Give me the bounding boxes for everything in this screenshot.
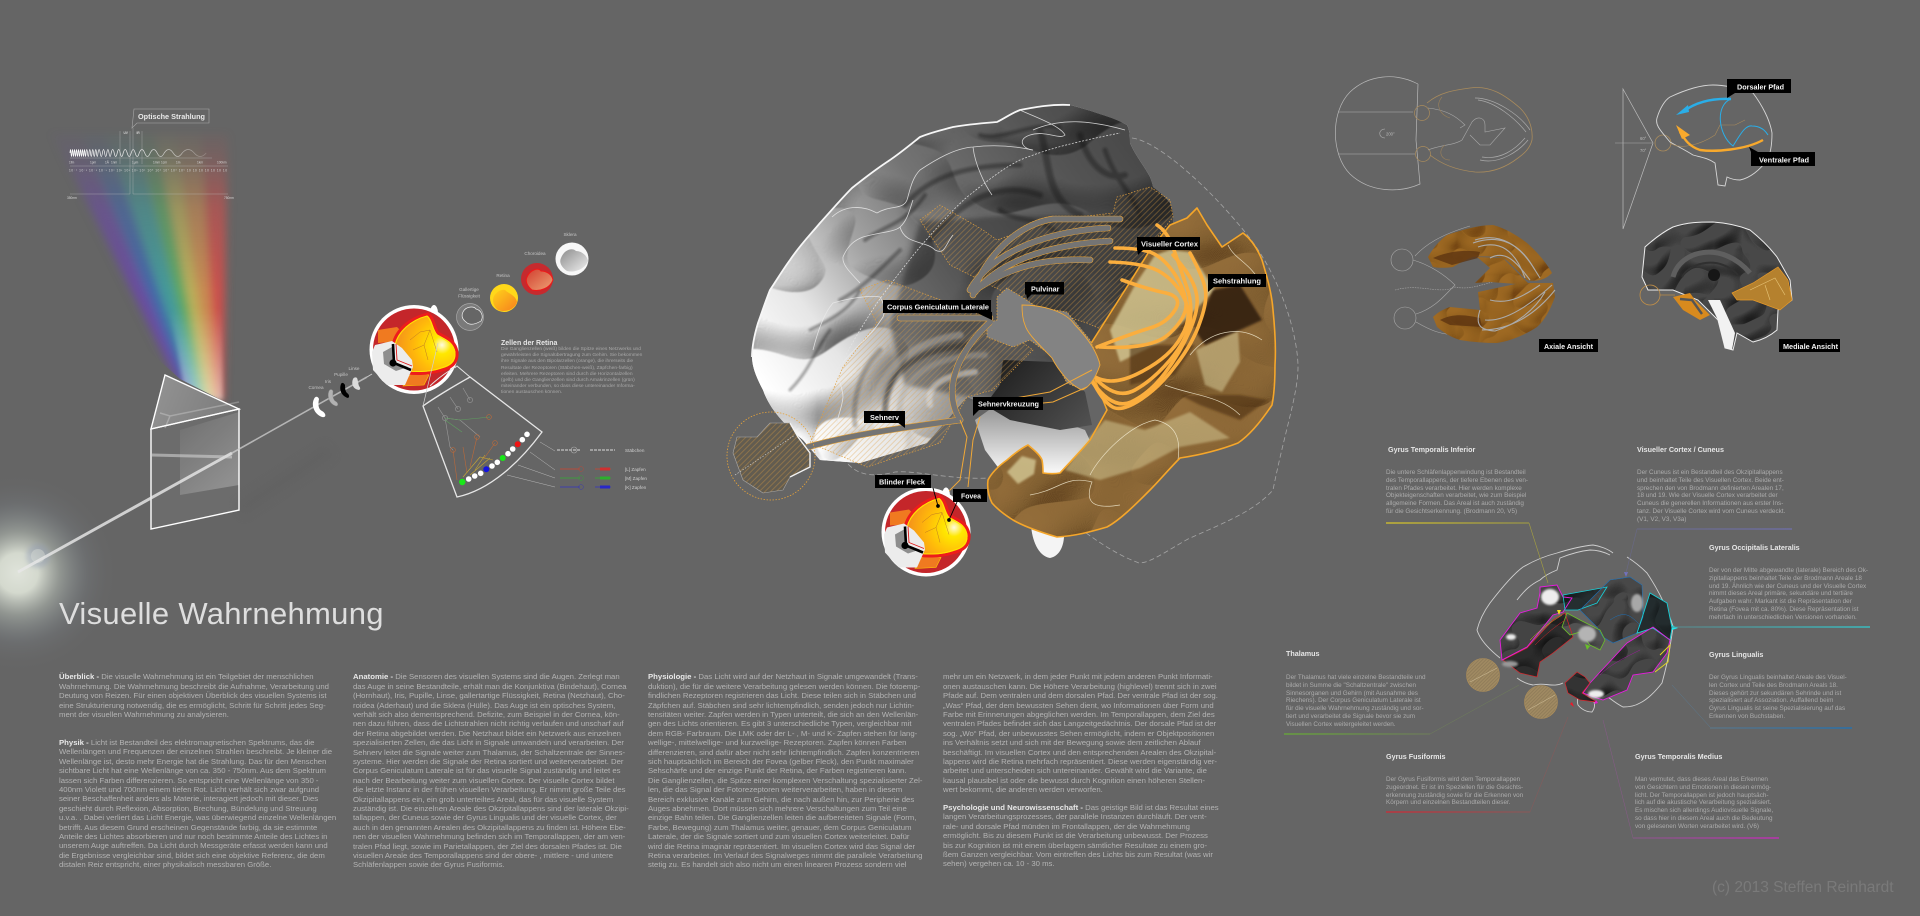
callout text: Thalamus: bildet in Summe die "Schaltzentrale" zwischen (1286, 682, 1416, 689)
text: Physiologie: len, die das Signal der Fotorezeptoren weiterverarbeiten, haben in diesem (648, 785, 902, 794)
callout text: Visueller Cortex / Cuneus: und beinhaltet Teile des Visuellen Cortex. Beide ent- (1637, 477, 1784, 484)
text: Zellen der Retina: miteinander verbunden, so dass diese untereinander Informa- (501, 384, 635, 389)
iris (328, 390, 338, 406)
text: Physiologie: Physiologie - Das Licht wird auf der Netzhaut in Signale umgewandelt (Trans- (648, 672, 918, 681)
text: Physiologie continued: ins Verhältnis setzt und sich mit der Bewegung sowie dem zeitlichen Ablauf (943, 738, 1201, 747)
part labels: Retina (496, 273, 510, 278)
rainbow spectrum (69, 140, 232, 402)
text: Überblick: Wahrnehmung. Die Wahrnehmung beschreibt die Aufnahme, Verarbeitung und (59, 682, 329, 691)
callout text: Visueller Cortex / Cuneus: Visueller Cortex / Cuneus (1637, 445, 1724, 454)
callout leader: fusiform (1386, 717, 1568, 812)
sulci shading (790, 126, 1140, 390)
electromagnetic spectrum scale: UV (124, 131, 129, 135)
text: Anatomie: (Hornhaut), Iris, Pupille, Linse, gallertartige Flüssigkeit, Retina (Netzhaut), Cho- (353, 691, 625, 700)
callout text: Visueller Cortex / Cuneus: (V1, V2, V3, V3a) (1637, 516, 1686, 522)
text: Physiologie: Retina verarbeitet. Im Verlauf des Signalweges nimmt die parallele Verarbeitung (648, 851, 922, 860)
white brainstem and nub (975, 400, 1092, 558)
small eye (882, 488, 970, 576)
text: Zellen der Retina: Resultate der Rezeptoren (Stäbchen-weiß), Zäpfchen-farbig) (501, 366, 633, 371)
receptor labels: Stäbchen (625, 448, 645, 453)
callout text: Gyrus Fusiformis: erkennung zuständig sowie für die Erkennen von (1386, 792, 1523, 798)
callout text: Gyrus Fusiformis: Gyrus Fusiformis (1386, 752, 1446, 761)
text: Anatomie: zuständig ist. Die einzelnen Areale des Okzipitallappens sind der laterale Okzipi- (353, 804, 629, 813)
text: Physiologie: Zäpfchen auf. Stäbchen sind sehr lichtempfindlich, senden jedoch nur Lichtin- (648, 701, 914, 710)
label: Mediale Ansicht (1779, 339, 1840, 352)
visual field top view outline (1335, 77, 1532, 190)
callout text: Thalamus (1286, 649, 1426, 728)
electromagnetic spectrum scale: 1cm (161, 160, 167, 164)
callout text: Gyrus Lingualis: len Cortex und Teile des Brodmann Areals 18. (1709, 682, 1838, 689)
label pointers (897, 249, 1215, 521)
callout text: Visueller Cortex / Cuneus (1637, 445, 1785, 522)
receptor leader lines (507, 442, 555, 487)
text: Anatomie: auch in den genannten Arealen des Okzipitallappens zu finden ist. Höhere Ebe- (353, 823, 626, 832)
text: Anatomie: Corpus Geniculatum Laterale ist für das visuelle Signal zuständig und leitet es (353, 766, 621, 775)
text: Psychologie und Neurowissenschaft: ßem Ganzen vergleichbar. Vom eintreffen des Lichts bis zum Resultat (was wir (943, 850, 1213, 859)
electromagnetic spectrum scale (67, 109, 234, 200)
text: Anatomie: Schläfenlappen sowie der Gyrus Fusiformis. (353, 860, 505, 869)
callout text: Gyrus Occipitalis Lateralis: Der von der Mitte abgewandte (laterale) Bereich des Ok- (1709, 567, 1868, 574)
callout text: Gyrus Temporalis Inferior: des Temporallappens, der tiefere Ebenen des ven- (1386, 477, 1528, 484)
callout leader: temporal medius (1603, 720, 1779, 838)
callout text: Gyrus Temporalis Medius: von gelesenen Worten verarbeitet wird. (V6) (1635, 822, 1759, 830)
text: Anatomie: die letzte Instanz in der frühen visuellen Verarbeitung. Er nimmt große Teile des (353, 785, 626, 794)
white highlights (1502, 589, 1643, 698)
label: Fovea: Fovea (961, 492, 982, 500)
pointer markers (1557, 572, 1678, 707)
electromagnetic spectrum scale: 100km (217, 160, 227, 164)
chiasm gold lines (947, 370, 1092, 493)
receptor labels: [K] Zapfen (625, 485, 647, 490)
text: Physik: 400nm Violett und 700nm einem tiefen Rot. Licht verhält sich zwar aufgrund (59, 785, 319, 794)
label: Ventraler Pfad: Ventraler Pfad (1759, 156, 1809, 164)
part labels: Choroidea (524, 251, 546, 256)
text: Physik: lassen sich Farben differenzieren. So entspricht eine Wellenlänge von 350 - (59, 776, 318, 785)
electromagnetic spectrum scale: 1mm (153, 160, 160, 164)
left eyeball section (727, 412, 815, 500)
text: Physiologie: einzige Bahn teilen. Die Ganglienzellen leiten die aufbereiteten Signale (Form, (648, 813, 916, 822)
callout leader: occipital lateral (1672, 626, 1870, 628)
callout text: Gyrus Temporalis Medius (1635, 752, 1773, 830)
electromagnetic spectrum scale: 1km (197, 160, 203, 164)
sphere: sklera (556, 242, 588, 276)
inner coloured lines (1530, 615, 1670, 675)
callout text: Gyrus Fusiformis: zugeordnet. Er ist im Speziellen für die Gesichts- (1386, 784, 1523, 791)
callout text: Gyrus Fusiformis (1386, 752, 1523, 806)
callout leader: temporal inferior (1386, 523, 1548, 583)
callout leader: lingual (1672, 685, 1852, 728)
electromagnetic spectrum scale: 1Å (105, 160, 110, 164)
label: Sehstrahlung: Sehstrahlung (1213, 276, 1261, 286)
text: Zellen der Retina: tionen austauschen können. (501, 390, 562, 395)
text: Physiologie continued: lappens wird die Retina mehrfach repräsentiert. Diese werden eigenständig ver- (943, 757, 1217, 766)
text: Physiologie continued: Farbe mit Erinnerungen abgeglichen werden. Im Temporallappen, dem Ziel des (943, 710, 1215, 719)
dorsal and ventral pathways (1615, 79, 1815, 229)
text: Anatomie: systeme. Hier werden die Signale der Retina sortiert und weiterverarbeitet. Der (353, 757, 624, 766)
text: Anatomie: Okzipitallappens ein, ein grob unterteiltes Areal, das für das visuelle System (353, 795, 613, 804)
callout text: Thalamus: Sinnesorganen und Gehirn (mit Ausnahme des (1286, 690, 1418, 696)
pupille (340, 383, 349, 398)
text: Physiologie: Farbe, Bewegung) zum Thalamus weiter, genauer, dem Corpus Geniculatum (648, 823, 912, 832)
callout text: Gyrus Occipitalis Lateralis: zipitallappens beinhaltet Teile der Brodmann Areale 18 (1709, 575, 1862, 582)
text: Physiologie: Die Ganglienzellen, die Spitze einer komplexen Verschaltung spezialisierter Zel- (648, 776, 922, 785)
callout text: Gyrus Temporalis Inferior: für die Gesichtserkennung. (Brodmann 20, V5) (1386, 508, 1517, 515)
text: Physiologie: Sehschärfe und der einzige Punkt der Retina, der Farben registrieren kann. (648, 766, 906, 775)
callout text: Gyrus Temporalis Medius: Gyrus Temporalis Medius (1635, 752, 1722, 761)
text: Physiologie: wellige-, mittelwellige- und kurzwellige- Rezeptoren. Zapfen können Farben (648, 738, 906, 747)
text: Physiologie: stetig zu. Es handelt sich also nicht um einen linearen Prozess sondern viel (648, 860, 906, 869)
callout text: Gyrus Lingualis: Gyrus Lingualis (1709, 650, 1763, 659)
electromagnetic spectrum scale: 10⁻⁴ 10⁻³ 10⁻² 10⁻¹ 10⁰ 10¹ 10² 10³ 10⁴ 10⁵ 10⁶ 10⁷ 10⁸ 10⁹ 10 10 10 10 10 10 10 (69, 168, 227, 172)
light source glow (0, 473, 118, 673)
brown temporal/occipital lobe (988, 208, 1275, 537)
callout text: Gyrus Temporalis Inferior (1386, 445, 1528, 515)
part labels: Sklera (563, 232, 577, 237)
colour-coded gyri brain (1466, 545, 1678, 718)
receptor labels: [L] Zapfen (625, 467, 646, 472)
text: Physik: Anteile des Lichtes absorbieren und nur noch bestimmte Anteile des Lichtes in (59, 832, 327, 841)
medial view brain (1640, 222, 1840, 352)
coloured segment outlines (1500, 577, 1672, 702)
callout text: Thalamus: tiert und verarbeitet die Signale bevor sie zum (1286, 713, 1415, 720)
hatched regions (810, 187, 1173, 467)
label: Pulvinar: Pulvinar (1031, 284, 1060, 294)
optic radiation (1092, 225, 1206, 408)
lobe highlights (1007, 250, 1240, 484)
text: Psychologie und Neurowissenschaft (943, 803, 1219, 868)
label: Sehnerv (864, 411, 905, 423)
dashed far-hemisphere outline (843, 138, 1298, 563)
text: Physiologie: differenzieren, sind dafür aber nicht sehr lichtempfindlich. Zapfen konzentrieren (648, 748, 919, 757)
text: Psychologie und Neurowissenschaft: bis zur Kognition ist mit einem überlagern sämtlicher Resultate zu einem gro- (943, 841, 1207, 850)
prism (151, 375, 330, 529)
text: Anatomie: spezialisierten Zellen, die das Licht in Signale umwandeln und verarbeiten. Der (353, 738, 624, 747)
text: Physiologie: tensitäten weiter. Zapfen werden in Typen unterteilt, die sich an den Wellenlän- (648, 710, 918, 719)
dorsal and ventral pathways: 60° (1640, 136, 1647, 141)
text: Physiologie: wird die Retina imaginär repräsentiert. Im visuellen Cortex wird das Signal der (648, 842, 915, 851)
text: Physiologie: dem RGB- Farbraum. Die LMK oder der L- , M- und K- Zapfen stehen für lang- (648, 729, 917, 738)
text: Physiologie continued: sog. „Wo“ Pfad, der unbewusstes Sehen ermöglicht, indem er Objektpositionen (943, 729, 1214, 738)
text: Anatomie: nen dazu führen, dass die Lichtstrahlen nicht richtig verlaufen und unscharf auf (353, 719, 624, 728)
electromagnetic spectrum scale: 1pm (90, 160, 97, 164)
callout text: Thalamus: für die visuelle Wahrnehmung zuständig und sor- (1286, 705, 1424, 712)
electromagnetic spectrum scale: 350nm (67, 196, 77, 200)
main brain illustration (727, 105, 1298, 577)
text: Psychologie und Neurowissenschaft: rale- und dorsale Pfad münden im Frontallappen, der die Wahrnehmung (943, 822, 1190, 831)
text: Zellen der Retina: erleiten. Mehrere Rezeptoren sind durch die Horizontalzellen (501, 372, 633, 377)
callout text: Gyrus Temporalis Medius: licht. Der Temporallappen ist jedoch hauptsäch- (1635, 792, 1769, 798)
label: Sehnerv: Sehnerv (870, 413, 899, 422)
text: Zellen der Retina (501, 340, 642, 395)
callout text: Gyrus Lingualis (1709, 650, 1847, 720)
text: Zellen der Retina: (gelb) und die Ganglienzellen sind durch Amakrinzellen (grün) (501, 378, 635, 383)
callout text: Gyrus Occipitalis Lateralis: Aufgaben wahr. Markant ist die Repräsentation der (1709, 598, 1852, 605)
text: Anatomie: verhält sich also dementsprechend. Defizite, zum Beispiel in der Cornea, kön- (353, 710, 620, 719)
text: Psychologie und Neurowissenschaft: Psychologie und Neurowissenschaft - Das geistige Bild ist das Resultat eines (943, 803, 1219, 812)
text: Psychologie und Neurowissenschaft: sehen) vergehen ca. 10 - 30 ms. (943, 859, 1055, 868)
blue dorsal arrow (1684, 99, 1731, 111)
part labels: Cornea (308, 385, 324, 390)
callout text: Gyrus Temporalis Inferior: tralen Pfades verarbeitet. Hier werden komplexe (1386, 484, 1522, 492)
text: Physiologie continued: Pfade auf. Dem ventralen und dem dorsalen Pfad. Der ventrale Pfad ist der sog. (943, 691, 1218, 700)
part labels: Linse (349, 366, 360, 371)
wave (70, 150, 206, 156)
text: Physiologie continued: ventralen Pfades befindet sich das Langzeitgedächtnis. Der dorsale Pfad ist der (943, 719, 1216, 728)
receptor labels: [M] Zapfen (625, 476, 647, 481)
text: Anatomie: tralen Pfad liegt, sowie im Parietallappen, der Ziel des dorsalen Pfades ist. Die (353, 842, 622, 851)
callout leader: visual cortex (1626, 529, 1792, 573)
label: Blinder Fleck (875, 475, 931, 488)
label: Corpus Geniculatum Laterale (883, 300, 991, 313)
part labels: Flüssigkeit (458, 294, 481, 298)
label: Dorsaler Pfad (1727, 79, 1791, 98)
text: Zellen der Retina: Zellen der Retina (501, 340, 557, 347)
callout text: Visueller Cortex / Cuneus: sprechen den von Brodmann definierten Arealen 17, (1637, 484, 1784, 492)
callout text: Gyrus Temporalis Inferior: Gyrus Temporalis Inferior (1388, 445, 1475, 454)
text: Anatomie: der Retina abgebildet werden. Die Netzhaut bildet ein Netzwerk aus einzelnen (353, 729, 621, 738)
callout text: Gyrus Lingualis: Erkennen von Buchstaben. (1709, 713, 1785, 720)
text: Physiologie: gen des Lichts orientieren. Es gibt 3 unterschiedliche Typen, vergleichbar mit (648, 719, 912, 728)
text: Psychologie und Neurowissenschaft: ermöglicht. Bis zu diesem Punkt ist die Verarbeitung unbewusst. Der Prozess (943, 831, 1208, 840)
white outline (1477, 545, 1673, 712)
eye cross-section (370, 305, 458, 394)
label: Ventraler Pfad (1749, 147, 1815, 166)
text: Physiologie continued: onen austauschen kann. Die Höhere Verarbeitung (highlevel) trennt sich in zwei (943, 682, 1217, 691)
text: Zellen der Retina: gewährleisten die Signalübertragung zum Gehirn. Sie bekommen (501, 353, 642, 358)
text: Anatomie: Anatomie - Die Sensoren des visuellen Systems sind die Augen. Zerlegt man (353, 672, 620, 681)
callout text: Gyrus Lingualis: Dieses gehört zur sekundären Sehrinde und ist (1709, 690, 1841, 696)
deep dark interior (890, 204, 1172, 400)
visual field top view outline: 200° (1386, 132, 1395, 136)
thalamus: pulvinar and nuclei (987, 288, 1100, 390)
sphere: choroidea (521, 263, 553, 295)
label: Sehstrahlung (1208, 274, 1266, 287)
brain segments (1500, 577, 1672, 702)
callout text: Gyrus Temporalis Medius: Es mischen sich allerdings Audiovisuelle Signale, (1635, 807, 1773, 814)
callout text: Thalamus: Thalamus (1286, 649, 1320, 658)
callout leader: thalamus (1284, 685, 1519, 734)
text: Physik: sichtbare Licht hat eine Wellenlänge von ca. 350 - 750nm. Aus dem Spektrum (59, 766, 326, 775)
callout text: Gyrus Fusiformis: Körpern und einzelnen Bestandteilen dieser. (1386, 799, 1510, 806)
text: Physiologie continued (943, 672, 1218, 794)
label: Axiale Ansicht: Axiale Ansicht (1544, 342, 1594, 351)
text: Physik: seiner Beschaffenheit anders als Materie, interagiert jedoch mit dieser. Dies (59, 794, 318, 803)
text: Zellen der Retina: ihre Signale aus den Bipolarzellen (orange), die ihrerseits die (501, 359, 633, 364)
electromagnetic spectrum scale: IR (136, 131, 140, 135)
lobe dark folds (1130, 285, 1268, 420)
text: Überblick: Überblick - Die visuelle Wahrnehmung ist ein Teilgebiet der menschlichen (59, 672, 314, 681)
axial view brain (1391, 225, 1598, 352)
part labels: Gallertige (459, 287, 479, 292)
text: Physiologie (648, 672, 922, 869)
callout text: Thalamus: Der Thalamus hat viele einzelne Bestandteile und (1286, 674, 1426, 681)
white top edge (752, 105, 1070, 357)
hatched eye circles (1466, 658, 1500, 692)
text: Überblick: eine Strukturierung notwendig, die es ermöglicht, Schritt für Schritt jedes Seg- (59, 701, 326, 710)
electromagnetic spectrum scale: 1µm (132, 160, 139, 164)
label: Sehnervkreuzung: Sehnervkreuzung (978, 400, 1039, 408)
callout text: Visueller Cortex / Cuneus: 18 und 19. Wie der Visuelle Cortex verarbeitet der (1637, 492, 1778, 499)
label: Dorsaler Pfad: Dorsaler Pfad (1737, 82, 1784, 92)
text: Physiologie: Laterale, der die Signale sortiert und zum visuellen Cortex weiterleitet. Dafür (648, 832, 909, 841)
receptor labels (625, 448, 647, 490)
text: Physik: u.v.a. . Dabei verliert das Licht Energie, was überwiegend einzelne Wellenlängen (59, 813, 336, 822)
label: Visueller Cortex (1137, 237, 1200, 250)
callout text: Visueller Cortex / Cuneus: Cuneus die generellen Informationen aus erster Ins- (1637, 500, 1783, 507)
callout: Optische Strahlung: Optische Strahlung (138, 112, 205, 121)
electromagnetic spectrum scale: 1nm (111, 160, 118, 164)
callout text: Gyrus Lingualis: Der Gyrus Lingualis beinhaltet Areale des Visuel- (1709, 674, 1847, 681)
text: Psychologie und Neurowissenschaft: langen Verarbeitungsprozesses, der parallele Instanzen durchläuft. Der vent- (943, 812, 1207, 821)
label: Corpus Geniculatum Laterale: Corpus Geniculatum Laterale (887, 302, 989, 312)
callout text: Gyrus Occipitalis Lateralis: und 19. Ähnlich wie der Cuneus und der Visuelle Cortex (1709, 582, 1866, 590)
callout text: Gyrus Temporalis Inferior: Objekteigenschaften verarbeitet, wie zum Beispiel (1386, 492, 1526, 499)
label: Fovea (953, 489, 987, 502)
text: Physiologie continued: wert bekommt, die anderen werden verworfen. (943, 785, 1103, 794)
callout text: Thalamus: Visuellen Cortex weitergeleitet werden. (1286, 720, 1396, 728)
orange ventral arrow (1680, 132, 1763, 151)
part labels: Iris (325, 379, 332, 384)
callout text: Gyrus Temporalis Inferior: Die untere Schläfenlappenwindung ist Bestandteil (1386, 469, 1526, 476)
text: Physik: betrifft. Aus diesem Grund erscheinen Gegenstände farbig, da sie estimmte (59, 823, 317, 832)
text: Physik: Physik - Licht ist Bestandteil des elektromagnetischen Spektrums, das die (59, 738, 314, 747)
text: Physik: Wellenlängen und Frequenzen der einzelnen Strahlen beschreibt. Je kleiner die (59, 747, 332, 756)
text: Physik: unserem Auge auftreffen. Da Licht durch Messgeräte erfasst werden kann und (59, 841, 328, 850)
callout text: Gyrus Occipitalis Lateralis: mehrfach in unterschiedlichen Versionen vorhanden. (1709, 614, 1857, 620)
text: Überblick (59, 672, 329, 719)
title: Visuelle Wahrnehmung (59, 596, 384, 631)
label: Sehnervkreuzung (973, 397, 1043, 410)
copyright: (c) 2013 Steffen Reinhardt (1712, 879, 1894, 896)
nerve tracts fan (808, 219, 1120, 447)
text: Physik: geschieht durch Reflexion, Absorption, Brechung, Bündelung und Streuung (59, 804, 317, 813)
electromagnetic spectrum scale: 1fm (69, 160, 75, 164)
text: Physiologie: sich hauptsächlich im Bereich der Fovea (gelber Fleck), den Punkt maximaler (648, 757, 914, 766)
callout text: Gyrus Lingualis: spezialisiert auf Assoziation. Auffallend beim (1709, 697, 1833, 704)
label: Visueller Cortex: Visueller Cortex (1141, 240, 1198, 248)
sphere: retina (490, 284, 518, 312)
text: Physik: die Ergebnisse vergleichbar sind, bildet sich eine objektive Referenz, die dem (59, 851, 325, 860)
eye anatomy exploded parts (308, 232, 588, 417)
text: Physik (59, 738, 336, 869)
dark mid-brain (985, 360, 1092, 430)
text: Physiologie continued: beschäftigt. Im visuellen Cortex und den entsprechenden Arealen des Okzipital- (943, 748, 1216, 757)
callout text: Visueller Cortex / Cuneus: tanz. Der Visuelle Cortex wird vom Cuneus verdeckt. (1637, 508, 1785, 515)
text: Physiologie continued: mehr um ein Netzwerk, in dem jeder Punkt mit jedem anderen Punkt Informati- (943, 672, 1213, 681)
callout text: Gyrus Temporalis Medius: von Gesichtern und Emotionen in diesen ermög- (1635, 784, 1771, 791)
text: Anatomie: nen der visuellen Wahrnehmung befinden sich im Temporallappen, der am ven- (353, 832, 625, 841)
callout text: Gyrus Temporalis Inferior: allgemeine Formen. Das Areal ist auch zuständig (1386, 500, 1524, 507)
electromagnetic spectrum scale: 750nm (224, 196, 234, 200)
text: Überblick: ment der visuellen Wahrnehmung zu analysieren. (59, 710, 229, 719)
label: Mediale Ansicht: Mediale Ansicht (1783, 342, 1839, 351)
text: Anatomie: nach der Bearbeitung weiter zum visuellen Cortex. Der visuelle Cortex bildet (353, 776, 614, 785)
callout text: Gyrus Lingualis: Gyrus Lingualis ist seine Spezialisierung auf das (1709, 705, 1845, 712)
inner concentric gyri (854, 335, 985, 430)
text: Überblick: Deutung von Reizen. Für einen objektiven Überblick des visuellen Systems ist (59, 691, 327, 700)
callout text: Gyrus Temporalis Medius: Man vermutet, dass dieses Areal das Erkennen (1635, 776, 1768, 783)
part labels: Pupille (334, 372, 348, 377)
text: Physiologie: Bereich exklusive Kanäle zum Gehirn, die nach außen hin, zur Peripherie des (648, 795, 914, 804)
callout text: Gyrus Occipitalis Lateralis (1709, 543, 1868, 620)
text: Zellen der Retina: Die Ganglienzellen (weiß) bilden die Spitze eines Netzwerks und (501, 347, 641, 352)
text: Anatomie (353, 672, 629, 869)
callout text: Gyrus Occipitalis Lateralis: nimmt dieses Areal primäre, sekundäre und tertiäre (1709, 590, 1853, 597)
text: Anatomie: Sehnerv leitet die Signale weiter zum Thalamus, der Schaltzentrale der Sinnes- (353, 748, 625, 757)
text: Physik: Wellenlänge ist, desto mehr Energie hat die Strahlung. Das für den Menschen (59, 757, 326, 766)
electromagnetic spectrum scale: 1m (176, 160, 181, 164)
text: Anatomie: visuellen Areale des Temporallappens sind der obere- , mittlere - und untere (353, 851, 613, 860)
callout text: Thalamus: Riechens). Der Corpus Geniculatum Laterale ist (1286, 697, 1421, 704)
callout text: Visueller Cortex / Cuneus: Der Cuneus ist ein Bestandteil des Okzipitallappens (1637, 469, 1783, 476)
callout text: Gyrus Occipitalis Lateralis: Gyrus Occipitalis Lateralis (1709, 543, 1800, 552)
callout text: Gyrus Temporalis Medius: so dass hier in diesem Areal auch die Bedeutung (1635, 815, 1773, 822)
callout: Optische Strahlung (132, 109, 209, 128)
text: Physiologie continued: „Was“ Pfad, der dem bewussten Sehen dient, wo Informationen über Form und (943, 701, 1214, 710)
text: Anatomie: das Auge in seine Bestandteile, erhält man die Konjunktiva (Bindehaut), Cornea (353, 682, 627, 691)
cortex contour lines (813, 110, 1125, 423)
light beam (18, 377, 367, 572)
dorsal and ventral pathways: 70° (1640, 148, 1647, 153)
linse (352, 377, 360, 390)
cornea (313, 397, 325, 417)
receptor cell glyphs (557, 447, 615, 489)
label: Blinder Fleck: Blinder Fleck (879, 478, 925, 486)
text: Physik: distalen Reiz entspricht, einer physikalisch messbaren Größe. (59, 860, 271, 869)
text: Physiologie continued: arbeitet und unterscheiden sich untereinander. Gewählt wird die Variante, die (943, 766, 1207, 775)
text: Physiologie: findlichen Rezeptoren registrieren das Licht. Diese teilen sich in Stäbchen und (648, 691, 916, 700)
sphere: vitreous (456, 304, 484, 330)
text: Physiologie: duktion), die für die weitere Verarbeitung gelesen werden können. Die fotoemp- (648, 682, 920, 691)
text: Anatomie: roidea (Aderhaut) und die Sklera (Hülle). Das Auge ist ein optisches System, (353, 701, 615, 710)
text: Physiologie: Auges abnehmen. Dort müssen sich mehrere Verschaltungen zum Teil eine (648, 804, 907, 813)
text: Anatomie: tallappen, der Cuneus sowie der Gyrus Lingualis und der visuelle Cortex, der (353, 813, 617, 822)
retina cell funnel (423, 343, 647, 497)
text: Physiologie continued: kausal plausibel ist oder die bewusst durch Kognition einen höheren Stellen- (943, 776, 1205, 785)
neuron network (438, 388, 497, 480)
callout text: Gyrus Temporalis Medius: lich auf die akustische Verarbeitung spezialisiert. (1635, 799, 1771, 806)
part labels (308, 232, 577, 390)
grey cortex with folded relief (752, 105, 1173, 463)
callout text: Gyrus Occipitalis Lateralis: Retina (Fovea mit ca. 80%). Diese Repräsentation ist (1709, 606, 1858, 613)
callout text: Gyrus Fusiformis: Der Gyrus Fusiformis wird dem Temporallappen (1386, 776, 1520, 783)
photoreceptor row (459, 432, 530, 485)
label: Pulvinar (1025, 282, 1064, 294)
label: Axiale Ansicht (1539, 339, 1598, 352)
